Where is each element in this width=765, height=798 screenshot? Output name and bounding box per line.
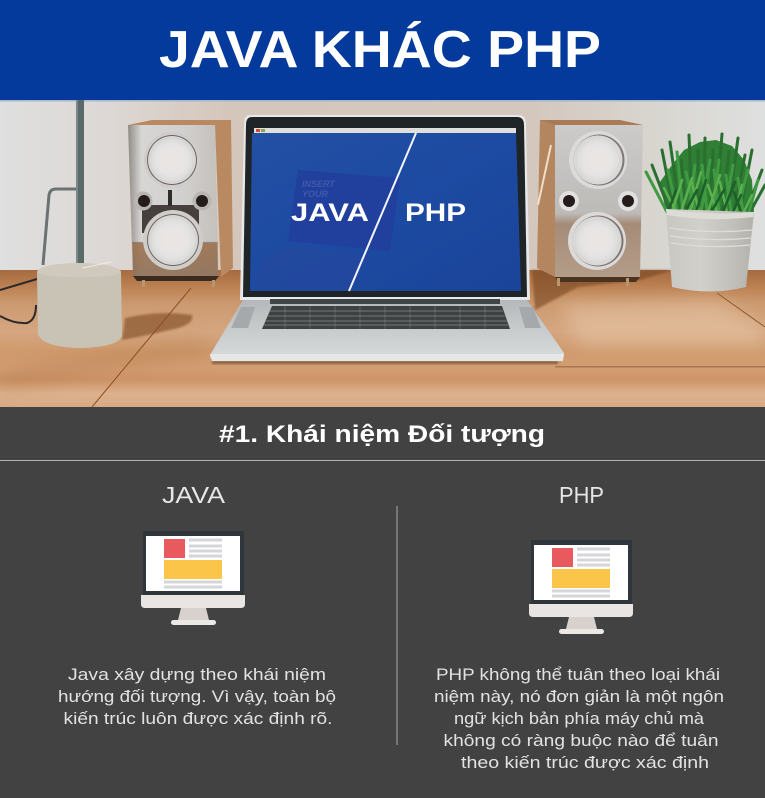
laptop: PHP	[405, 199, 466, 227]
photo: laptop on wooden desk	[0, 100, 765, 407]
concrete base	[37, 263, 122, 348]
text block: PHP description: PHP không thể tuân theo loại khái	[436, 665, 720, 684]
text block: PHP description: không có ràng buộc nào để tuân	[444, 731, 718, 750]
text block: JAVA description	[58, 665, 336, 728]
woofers	[144, 132, 200, 188]
text block: PHP description: ngữ kịch bản phía máy chủ mà	[454, 709, 705, 728]
desk shading	[0, 270, 765, 390]
text block: PHP description	[434, 665, 724, 772]
cable	[0, 279, 37, 323]
ports	[559, 191, 579, 211]
text block: PHP description: theo kiến trúc được xác định	[461, 753, 709, 772]
text block: PHP description: niệm này, nó đơn giản là một ngôn	[434, 687, 724, 706]
woofers	[569, 131, 627, 189]
grass	[646, 134, 765, 212]
column title: JAVA: JAVA	[162, 482, 226, 508]
base	[210, 300, 564, 361]
lid	[240, 115, 530, 300]
column title: PHP: PHP	[559, 482, 604, 508]
laptop	[210, 115, 564, 361]
left speaker	[128, 120, 233, 287]
text block: JAVA description: hướng đối tượng. Vì vậy, toàn bộ	[58, 687, 336, 706]
title banner	[0, 0, 765, 100]
faded photo on screen: YOUR	[302, 189, 329, 199]
browser bar	[254, 128, 516, 133]
faded photo on screen	[254, 170, 400, 291]
right speaker	[537, 120, 643, 286]
hinge	[270, 299, 500, 304]
lamp	[0, 100, 122, 348]
keyboard	[262, 306, 510, 329]
title: JAVA KHÁC PHP	[159, 21, 601, 79]
text block: JAVA description: kiến trúc luôn được xác định rõ.	[64, 709, 332, 728]
speaker grilles	[231, 307, 255, 328]
plant in metal pot	[646, 134, 765, 292]
plank seams	[92, 288, 765, 407]
section heading: #1. Khái niệm Đối tượng	[219, 421, 545, 448]
screen labels: JAVA	[291, 199, 369, 227]
icon: monitor JAVA	[141, 531, 245, 625]
ports	[134, 192, 152, 210]
icon: monitor PHP	[529, 540, 633, 634]
faded photo on screen: INSERT	[302, 179, 336, 189]
comparison section background	[0, 407, 765, 798]
screen	[250, 133, 521, 291]
text block: JAVA description: Java xây dựng theo khái niệm	[68, 665, 326, 684]
